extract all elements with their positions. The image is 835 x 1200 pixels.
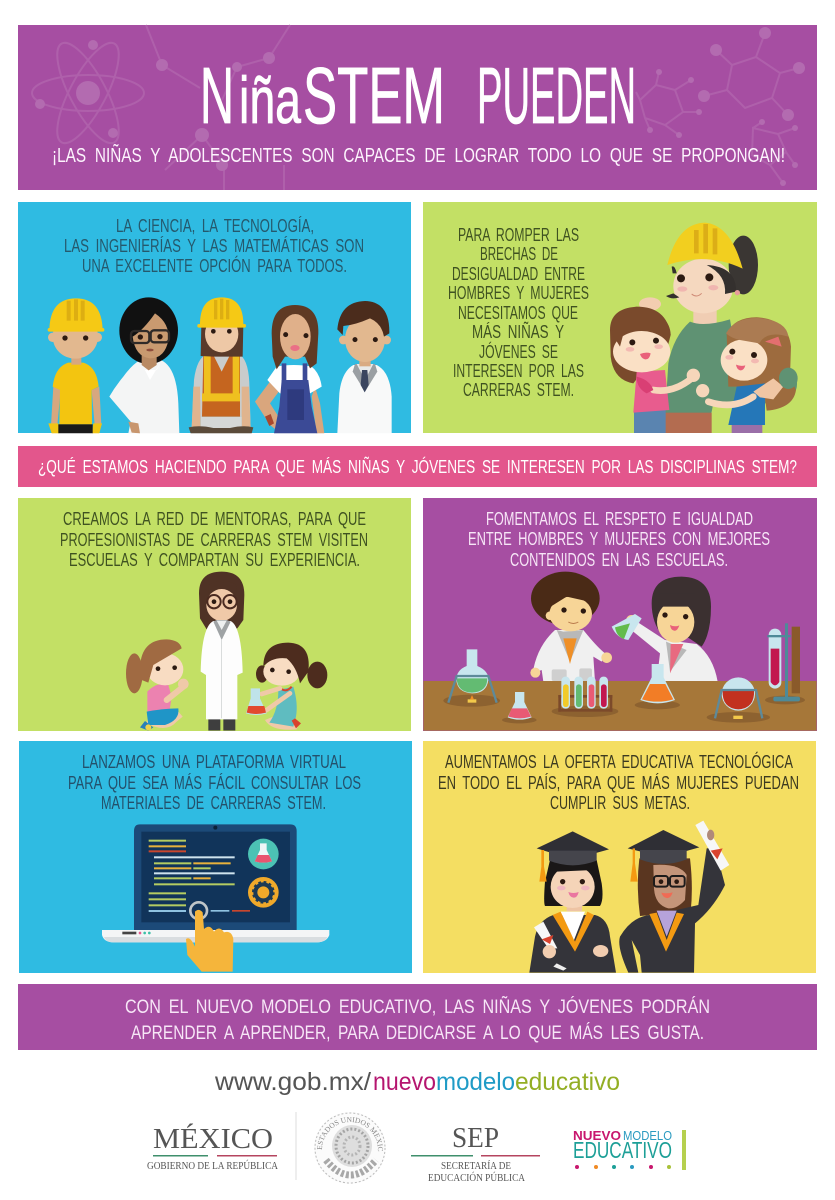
panel text: HOMBRES Y MUJERES bbox=[448, 283, 589, 303]
panel text: NECESITAMOS QUE bbox=[458, 303, 578, 323]
icon: gear bbox=[248, 877, 279, 908]
logo: Nuevo Modelo Educativo bbox=[573, 1128, 686, 1170]
question banner bbox=[18, 446, 817, 487]
panel text: UNA EXCELENTE OPCIÓN PARA TODOS. bbox=[82, 255, 347, 276]
panel text: CARRERAS STEM. bbox=[463, 380, 574, 400]
panel text: CUMPLIR SUS METAS. bbox=[550, 793, 690, 813]
laptop with hand bbox=[102, 824, 329, 972]
closing banner bbox=[18, 984, 817, 1050]
panel text: MÁS NIÑAS Y bbox=[472, 321, 564, 342]
orange flask bbox=[640, 664, 675, 703]
panel text: DESIGUALDAD ENTRE bbox=[452, 264, 585, 284]
panel text: LANZAMOS UNA PLATAFORMA VIRTUAL bbox=[82, 752, 346, 772]
panel text bbox=[438, 751, 799, 813]
test tube rack bbox=[558, 677, 612, 712]
panel text: ESCUELAS Y COMPARTAN SU EXPERIENCIA. bbox=[69, 550, 360, 570]
panel text bbox=[60, 509, 368, 570]
girl in blue bbox=[696, 317, 798, 433]
panel: virtual platform bbox=[19, 741, 412, 973]
closing text bbox=[125, 996, 710, 1044]
panel: professionals bbox=[18, 202, 411, 433]
logo: SEP bbox=[411, 1122, 540, 1184]
panel text: MATERIALES DE CARRERAS STEM. bbox=[101, 793, 326, 813]
panel text bbox=[68, 752, 361, 813]
logo: Mexico government: GOBIERNO DE LA REPÚBLICA bbox=[147, 1160, 279, 1172]
title: STEM bbox=[303, 51, 445, 140]
boy scientist bbox=[530, 572, 612, 682]
logo: SEP: SEP bbox=[452, 1122, 499, 1154]
panel: mentors network bbox=[18, 498, 411, 731]
icon: tapping hand bbox=[186, 902, 233, 972]
title: iña bbox=[239, 63, 301, 137]
panel text: PARA ROMPER LAS bbox=[458, 225, 579, 245]
website url: modelo bbox=[436, 1068, 515, 1096]
title: N bbox=[200, 51, 234, 140]
header banner: PUEDEN bbox=[477, 51, 636, 140]
test tube stand with ruler bbox=[767, 623, 800, 701]
panel text: LAS INGENIERÍAS Y LAS MATEMÁTICAS SON bbox=[64, 236, 364, 256]
panel text: PARA QUE SEA MÁS FÁCIL CONSULTAR LOS bbox=[68, 773, 361, 793]
graduate with black hair bbox=[529, 831, 616, 973]
laptop bbox=[102, 824, 329, 942]
logo: SEP: EDUCACIÓN PÚBLICA bbox=[428, 1172, 526, 1184]
website url: nuevo bbox=[373, 1068, 436, 1096]
website url bbox=[214, 1068, 620, 1096]
panel text: CONTENIDOS EN LAS ESCUELAS. bbox=[510, 550, 728, 570]
lab table bbox=[423, 681, 817, 731]
website url: educativo bbox=[515, 1068, 620, 1096]
code lines on screen bbox=[149, 840, 250, 912]
panel text bbox=[448, 225, 589, 400]
worker in orange safety vest bbox=[189, 297, 253, 433]
header banner bbox=[18, 25, 817, 190]
panel: technological education bbox=[423, 741, 816, 973]
logo: seal of Mexico: ESTADOS UNIDOS MEXICANOS bbox=[317, 1117, 383, 1152]
panel text bbox=[64, 216, 364, 276]
panel text: CREAMOS LA RED DE MENTORAS, PARA QUE bbox=[63, 509, 366, 529]
decorative science background bbox=[32, 25, 799, 190]
logo: Nuevo Modelo Educativo: MODELO bbox=[623, 1128, 672, 1143]
panel text: PROFESIONISTAS DE CARRERAS STEM VISITEN bbox=[60, 530, 368, 550]
five professionals bbox=[48, 297, 392, 433]
logo: seal of Mexico bbox=[296, 1112, 386, 1184]
mentor and two girls bbox=[126, 572, 327, 731]
logo: Mexico government bbox=[147, 1122, 279, 1172]
panel: equality contents bbox=[423, 498, 817, 731]
red flask on stand bbox=[715, 677, 762, 719]
woman with glasses in white shirt bbox=[109, 297, 179, 433]
website url: www.gob.mx/ bbox=[214, 1068, 371, 1096]
round green flask on stand bbox=[448, 649, 497, 703]
panel text: LA CIENCIA, LA TECNOLOGÍA, bbox=[116, 216, 314, 236]
mother bbox=[639, 223, 797, 433]
title bbox=[200, 51, 636, 140]
logo: Nuevo Modelo Educativo: EDUCATIVO bbox=[573, 1137, 672, 1163]
worker in yellow shirt bbox=[48, 298, 104, 433]
girl in pink bbox=[610, 307, 700, 433]
kneeling girl with ponytail bbox=[126, 639, 189, 731]
kneeling girl with flask bbox=[246, 643, 327, 730]
panel text: JÓVENES SE bbox=[479, 341, 558, 362]
panel text: INTERESEN POR LAS bbox=[453, 361, 584, 381]
woman in blue overalls bbox=[255, 305, 324, 433]
graduate with glasses holding diploma bbox=[619, 821, 729, 973]
scientist in lab coat with tie bbox=[337, 301, 392, 433]
panel: mother and daughters bbox=[423, 202, 817, 433]
mentor in lab coat bbox=[199, 572, 244, 731]
small pink flask bbox=[508, 692, 532, 720]
closing text: CON EL NUEVO MODELO EDUCATIVO, LAS NIÑAS Y JÓVENES PODRÁN bbox=[125, 996, 710, 1018]
panel text bbox=[468, 509, 770, 570]
mother with hard hat and two girls bbox=[610, 223, 798, 433]
logo: Mexico government: MÉXICO bbox=[153, 1122, 273, 1155]
children in the laboratory bbox=[423, 572, 817, 731]
icon: flask bbox=[248, 839, 279, 869]
panel text: BRECHAS DE bbox=[480, 244, 558, 264]
logo: SEP: SECRETARÍA DE bbox=[441, 1160, 511, 1172]
girl scientist holding flask bbox=[612, 577, 718, 682]
closing text: APRENDER A APRENDER, PARA DEDICARSE A LO QUE MÁS LES GUSTA. bbox=[131, 1023, 704, 1044]
two graduates bbox=[529, 821, 729, 973]
logo: Nuevo Modelo Educativo: NUEVO bbox=[573, 1128, 621, 1143]
